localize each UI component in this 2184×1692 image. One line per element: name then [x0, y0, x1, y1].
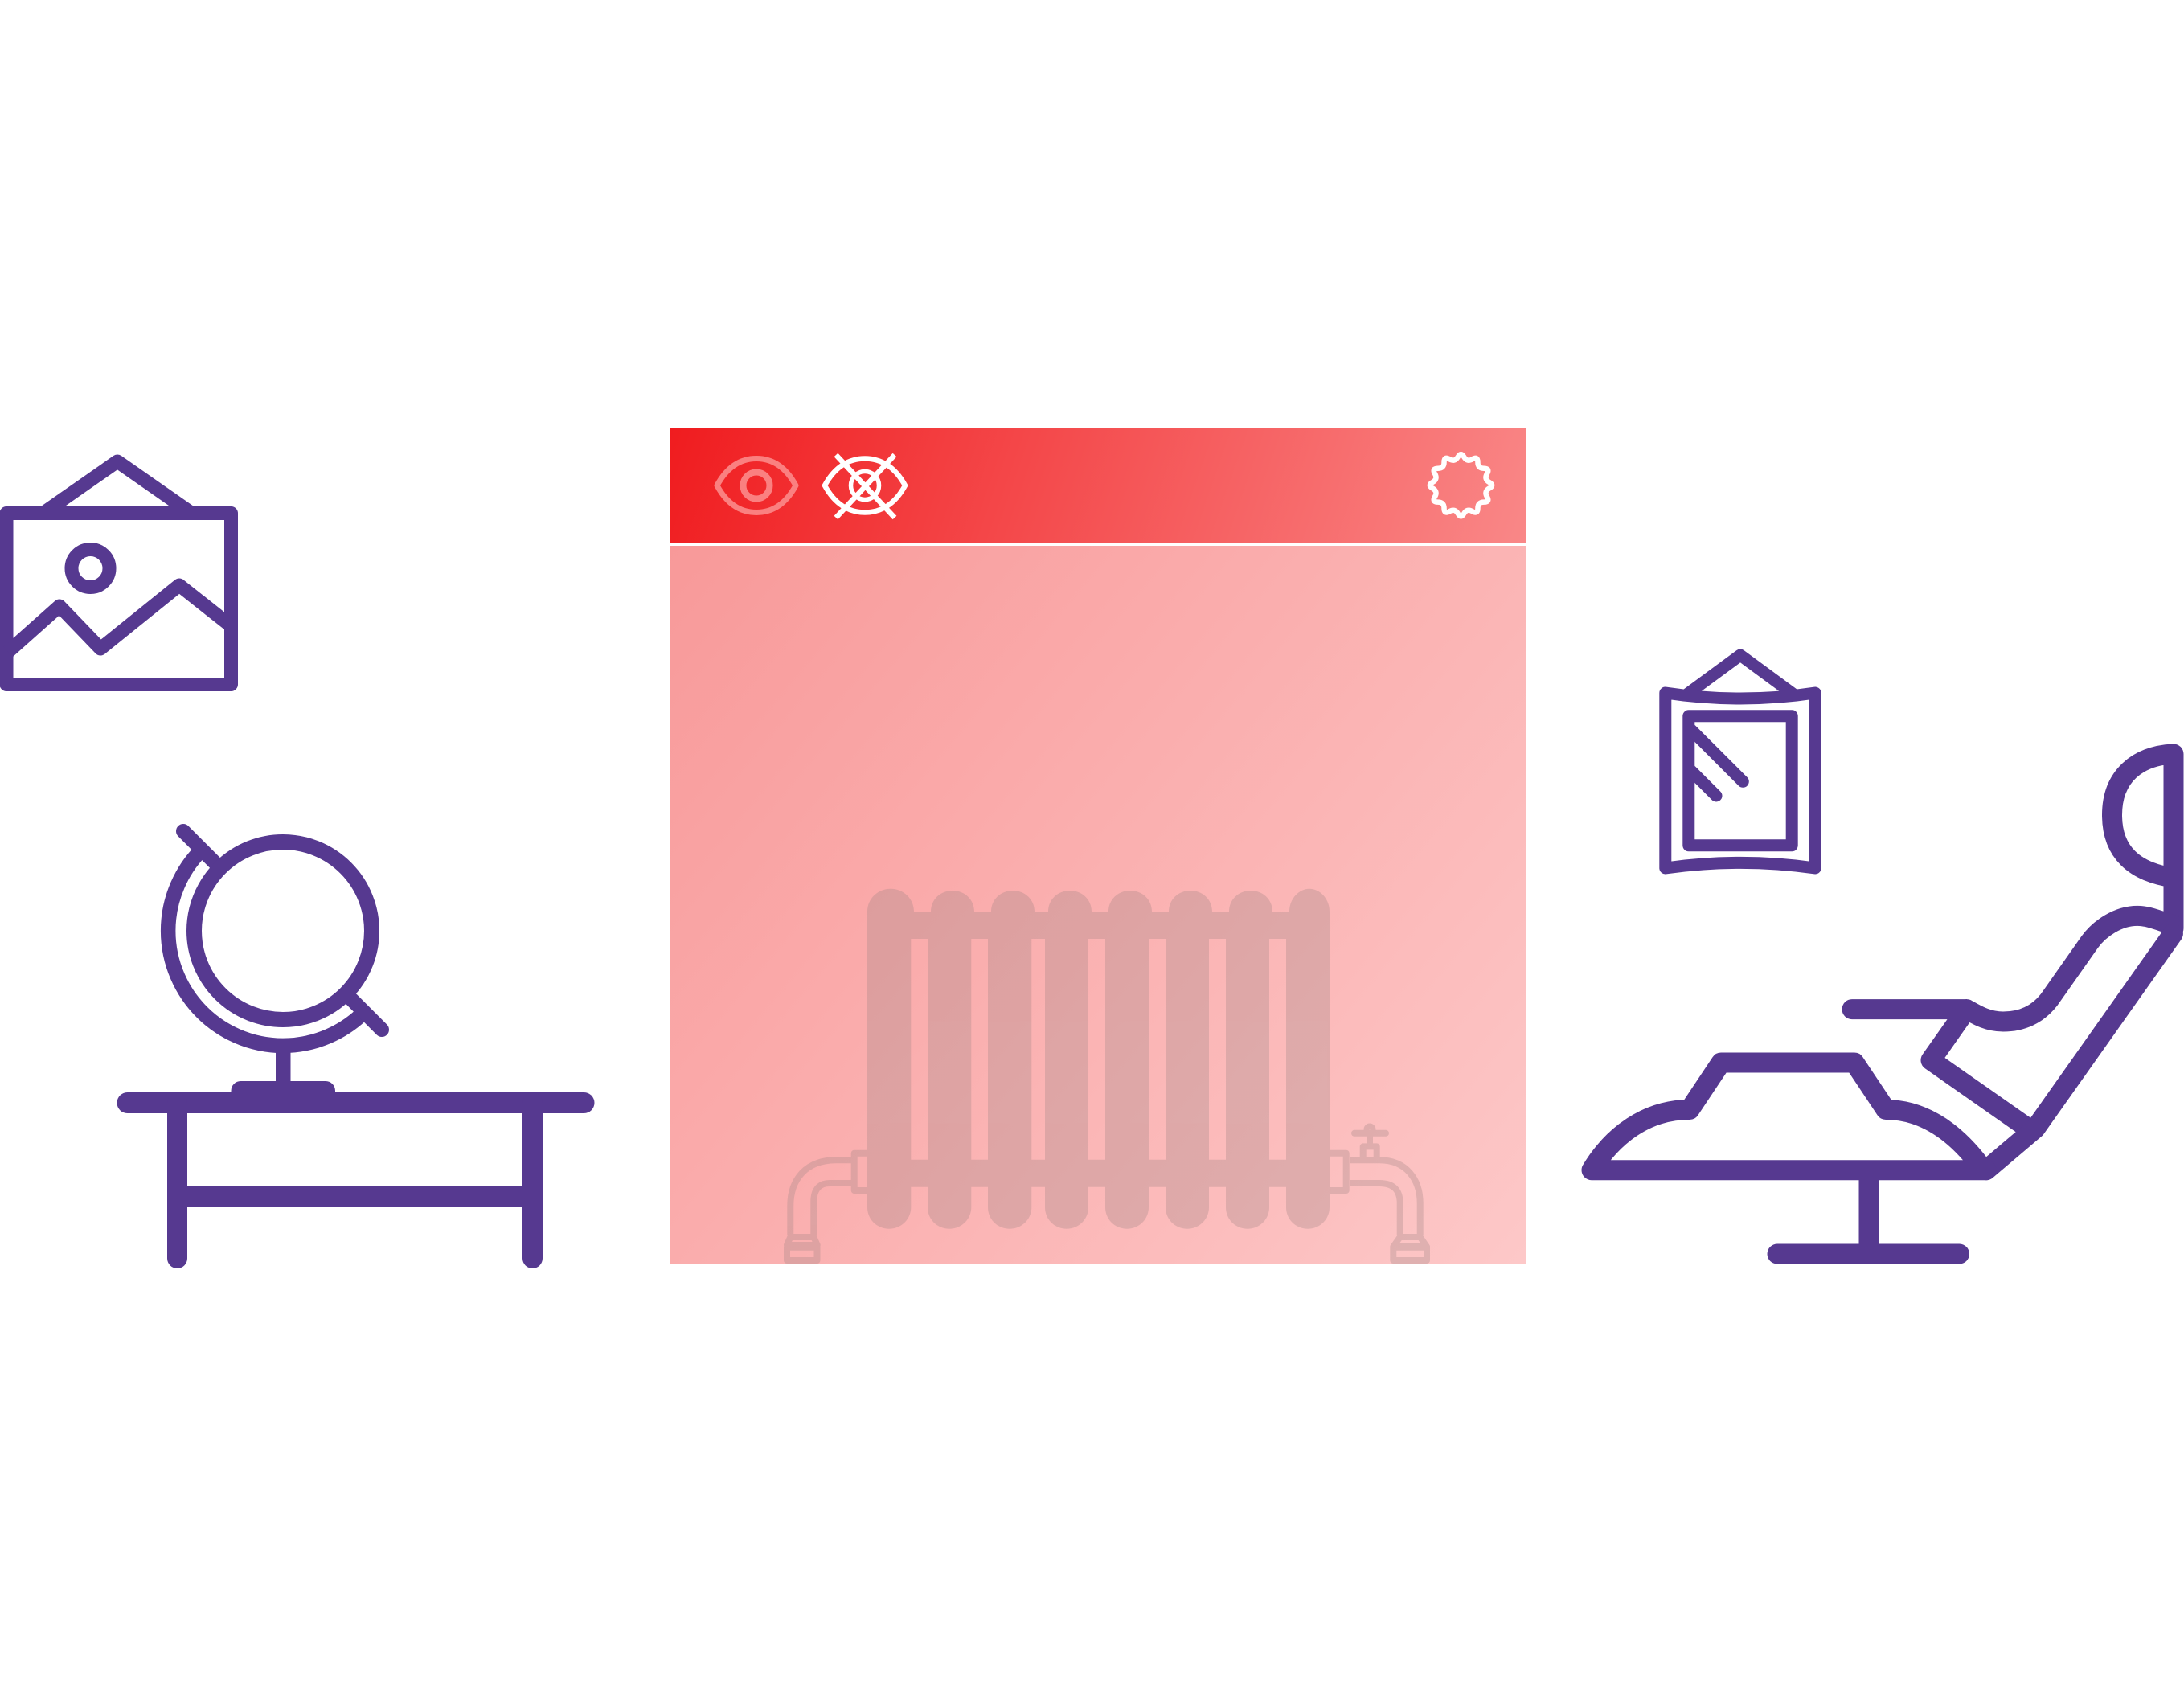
globe stem: [276, 1048, 291, 1088]
globe axis: [183, 831, 382, 1030]
radiator manifold: [867, 912, 1330, 1187]
left pipe: [787, 1153, 867, 1260]
icon: eye: [717, 458, 796, 513]
radiator: [787, 889, 1427, 1260]
icon: settings gear: [1430, 454, 1492, 516]
icon: reclining chair: [1592, 754, 2174, 1254]
globe base: [232, 1081, 335, 1102]
icon: framed landscape picture: [6, 461, 232, 685]
frame diagonal: [1986, 934, 2173, 1170]
table crossbar: [177, 1186, 532, 1207]
icon: globe on table: [127, 831, 584, 1259]
headrest: [2112, 754, 2174, 928]
radiator lower lobes: [867, 1186, 1330, 1229]
globe outer arc: [168, 850, 364, 1046]
table legs: [177, 1103, 532, 1259]
icon: mirror: [1666, 655, 1815, 868]
panel: header bar: [670, 428, 1526, 543]
table top: [127, 1092, 584, 1113]
radiator top humps: [867, 889, 1330, 939]
pedestal and base: [1858, 1170, 1879, 1254]
seat: [1592, 1063, 1986, 1170]
panel: main body: [670, 546, 1526, 1264]
icon: crossed-out eye: [825, 455, 905, 518]
globe sphere: [195, 842, 371, 1019]
right pipe and valve: [1330, 1127, 1427, 1260]
backrest: [1852, 916, 2174, 1130]
